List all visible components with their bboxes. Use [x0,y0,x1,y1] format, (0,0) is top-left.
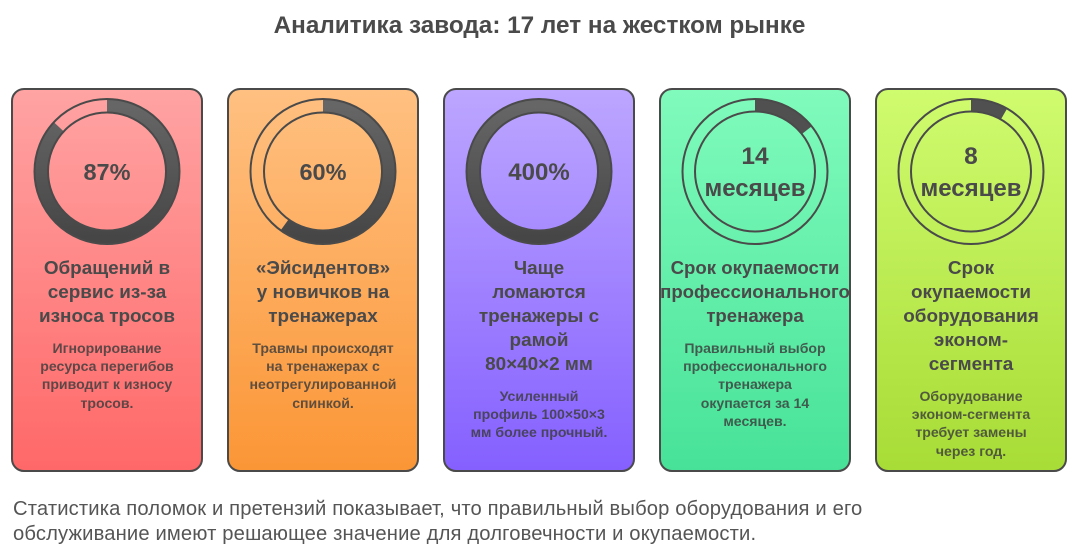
heading: card 5: сегмента [929,354,1013,375]
heading: card 1: износа тросов [39,306,175,327]
heading: card 3: ломаются [492,282,586,303]
heading: card 4: профессионального [660,281,850,302]
footer text: обслуживание имеют решающее значение для долговечности и окупаемости. [13,523,756,545]
chart: 14 months ring [682,99,828,244]
footer text: Статистика поломок и претензий показывает, что правильный выбор оборудования и его [13,498,862,520]
description: card 3: Усиленный [500,388,578,404]
footer text [13,498,862,545]
heading: card 4 [660,257,850,326]
description: card 4 [683,340,827,429]
heading: card 3: рамой [510,330,568,351]
chart: 14 months ring: месяцев [704,175,806,202]
description: card 5: эконом-сегмента [912,406,1030,422]
description: card 4: Правильный выбор [684,340,826,356]
chart: 60% ring: 60% [299,159,347,185]
heading: card 2: «Эйсидентов» [256,258,390,279]
description: card 1: приводит к износу [42,376,172,392]
description: card 1: Игнорирование [53,340,161,356]
heading: card 2 [256,258,390,327]
panel: 8 months payback [875,88,1067,472]
heading: card 2: тренажерах [268,306,378,327]
chart: 8 months ring: месяцев [920,175,1022,202]
description: card 4: профессионального [683,358,827,374]
chart: 87% ring [34,99,180,244]
chart: 400% ring: 400% [508,159,570,186]
description: card 2: Травмы происходят [252,340,394,356]
description: card 2: на тренажерах с [266,358,380,374]
chart: 60% ring [250,99,396,244]
description: card 4: тренажера [718,376,792,392]
description: card 3: мм более прочный. [471,424,607,440]
panel: 14 months payback [659,88,851,472]
description: card 5: через год. [936,443,1006,459]
heading: card 4: Срок окупаемости [671,257,839,278]
heading: card 2: у новичков на [257,282,389,303]
heading: card 5: Срок [948,258,994,279]
panel: 60% dissidents [227,88,419,472]
heading: card 3: 80×40×2 мм [485,354,593,375]
description: card 1: ресурса перегибов [40,358,174,374]
heading: card 3 [479,258,599,375]
chart: 400% ring [466,99,612,244]
chart: 8 months ring [898,99,1044,244]
heading: card 1 [39,258,175,327]
heading: card 1: Обращений в [44,258,170,279]
panel: 87% cable wear [11,88,203,472]
description: card 4: месяцев. [723,413,787,429]
heading: card 5: окупаемости [911,282,1031,303]
heading: card 5: оборудования [903,306,1039,327]
title: Аналитика завода: 17 лет на жестком рынке [274,12,805,39]
description: card 5: требует замены [915,424,1027,440]
description: card 1: тросов. [81,395,133,411]
description: card 3: профиль 100×50×3 [473,406,605,422]
heading: card 4: тренажера [706,305,804,326]
description: card 4: окупается за 14 [701,395,809,411]
heading: card 5: эконом- [934,330,1008,351]
chart: 87% ring: 87% [83,159,131,185]
description: card 1 [40,340,174,411]
description: card 2: спинкой. [292,395,354,411]
chart: 14 months ring: 14 [741,143,769,170]
panel: 400% frame breakage [443,88,635,472]
chart: 8 months ring: 8 [964,143,978,170]
description: card 2 [250,340,396,411]
heading: card 3: Чаще [514,258,564,279]
heading: card 5 [903,258,1039,375]
description: card 2: неотрегулированной [250,376,396,392]
description: card 5: Оборудование [919,388,1023,404]
description: card 3 [471,388,607,440]
heading: card 1: сервис из-за [48,282,166,303]
description: card 5 [912,388,1030,459]
heading: card 3: тренажеры с [479,306,599,327]
